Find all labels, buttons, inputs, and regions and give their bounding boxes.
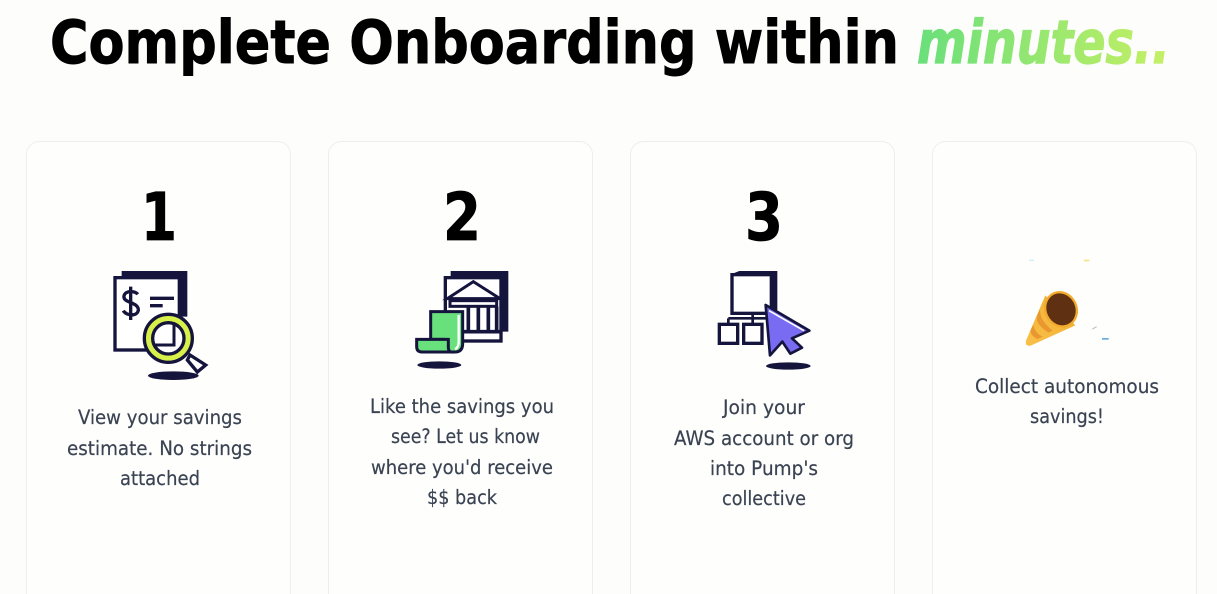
step 2 text: see? Let us know <box>391 425 540 448</box>
step 2 text <box>370 395 554 509</box>
title: Complete Onboarding within <box>50 8 899 78</box>
step 1 text: View your savings <box>78 406 242 429</box>
panel: step 1 <box>26 142 290 594</box>
step 2 text: where you'd receive <box>371 456 553 479</box>
step 2 text: $$ back <box>427 486 498 509</box>
step 4 text <box>975 375 1159 428</box>
icon: org chart with cursor <box>719 271 811 370</box>
icon: document with magnifier <box>115 271 206 380</box>
step 2 text: Like the savings you <box>370 395 554 418</box>
icon: bank with green scroll <box>417 271 508 369</box>
step 3 text: into Pump's <box>710 457 818 480</box>
step number 1: 1 <box>141 179 177 256</box>
panel: step 3 <box>630 142 894 594</box>
step 3 text: collective <box>722 487 806 510</box>
step number 3: 3 <box>745 179 783 256</box>
step 3 text: AWS account or org <box>674 427 854 450</box>
step 1 text: estimate. No strings <box>67 437 252 460</box>
step 4 text: Collect autonomous <box>975 375 1159 398</box>
step 1 text <box>67 406 252 490</box>
step 1 text: attached <box>120 467 200 490</box>
icon: party popper <box>1026 260 1109 346</box>
step 3 text: Join your <box>721 396 806 419</box>
step 3 text <box>674 396 854 510</box>
panel: step 2 <box>328 142 592 594</box>
panel: step 4 <box>932 142 1196 594</box>
step number 2: 2 <box>443 179 481 256</box>
step 4 text: savings! <box>1030 405 1104 428</box>
